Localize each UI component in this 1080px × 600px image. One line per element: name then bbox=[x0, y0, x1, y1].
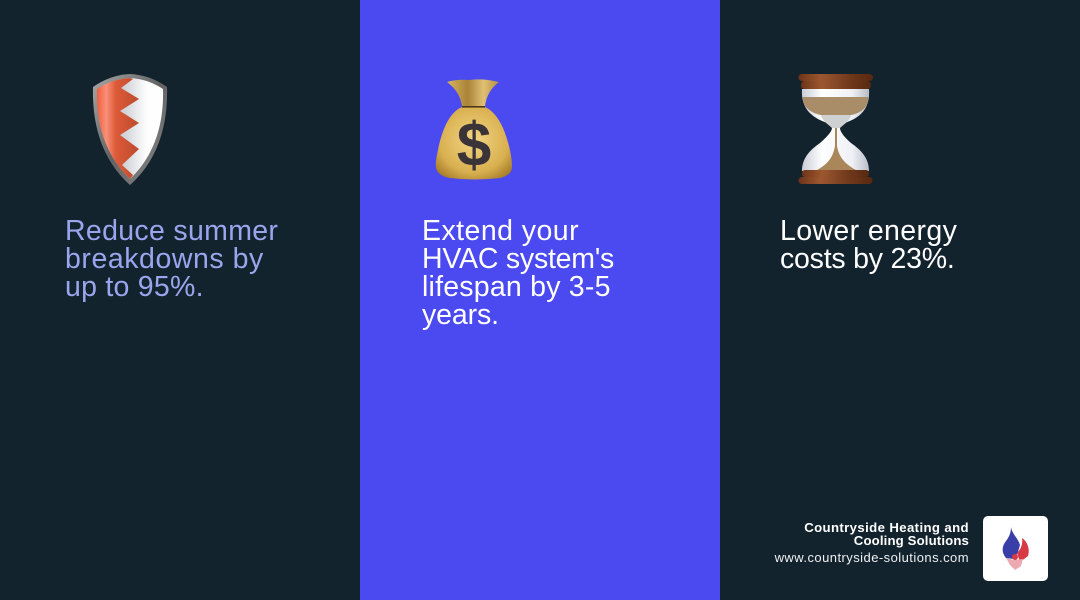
text: lower energy costs: Lower energy bbox=[780, 215, 957, 247]
text: extend lifespan: HVAC system's bbox=[422, 243, 614, 275]
text: lower energy costs: costs by 23%. bbox=[780, 243, 955, 275]
footer: company name and website: www.countryside-solutions.com bbox=[775, 550, 969, 565]
icon: shield bbox=[92, 74, 168, 185]
icon: money bag: $ bbox=[457, 111, 491, 180]
icon: money bag bbox=[436, 79, 512, 180]
panel: center column background bbox=[360, 0, 720, 600]
footer: company name and website bbox=[774, 520, 969, 565]
panel: left column background bbox=[0, 0, 360, 600]
text: reduce breakdowns: up to 95%. bbox=[65, 271, 204, 303]
text: extend lifespan bbox=[422, 215, 614, 331]
panel: right column background bbox=[720, 0, 1080, 600]
text: reduce breakdowns: Reduce summer bbox=[65, 215, 278, 247]
text: extend lifespan: lifespan by 3-5 bbox=[422, 271, 611, 303]
logo card bbox=[983, 516, 1048, 581]
text: extend lifespan: years. bbox=[422, 299, 499, 331]
text: lower energy costs bbox=[780, 215, 957, 275]
text: extend lifespan: Extend your bbox=[422, 215, 579, 247]
text: reduce breakdowns bbox=[65, 215, 278, 303]
footer: company name and website: Cooling Solutions bbox=[854, 533, 969, 548]
text: reduce breakdowns: breakdowns by bbox=[65, 243, 264, 275]
icon: flame logo bbox=[1002, 527, 1029, 570]
footer: company name and website: Countryside Heating and bbox=[804, 520, 969, 535]
icon: hourglass bbox=[798, 74, 873, 184]
